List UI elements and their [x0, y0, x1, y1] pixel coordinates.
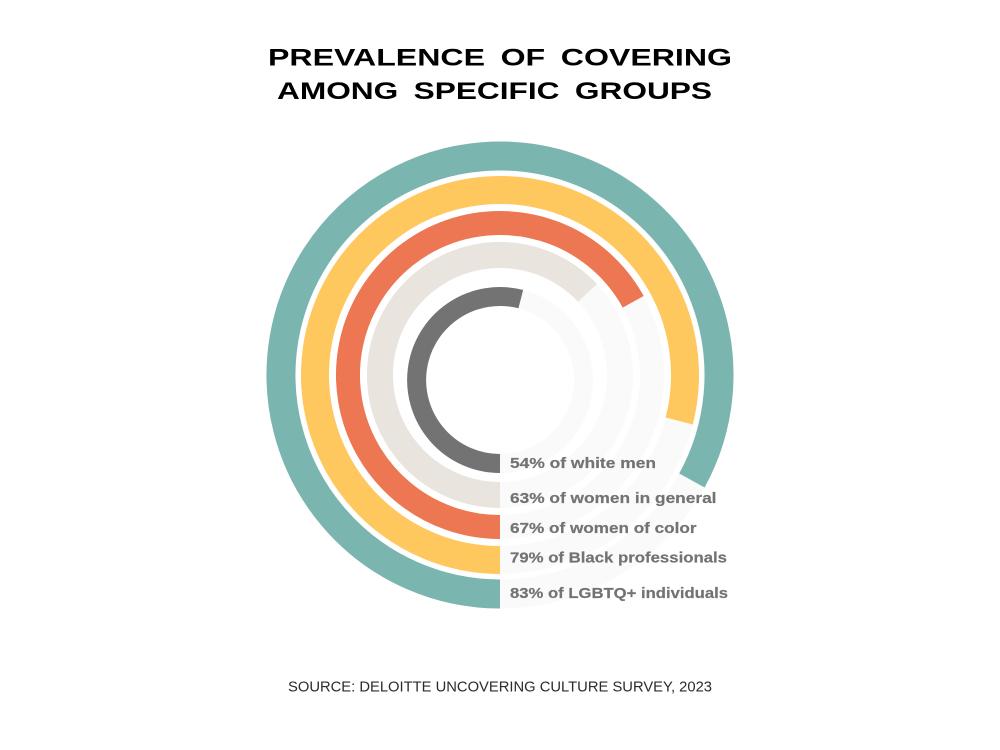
ring: 67% of women of color: [348, 223, 652, 527]
title: AMONG SPECIFIC GROUPS: [277, 78, 712, 105]
ring: 54% of white men: [416, 296, 584, 464]
ring labels: [510, 455, 728, 602]
source note: SOURCE: DELOITTE UNCOVERING CULTURE SURVEY, 2023: [288, 680, 712, 696]
ring: 83% of LGBTQ+ individuals: [281, 156, 719, 594]
label: women in general: 63% of women in general: [510, 490, 716, 507]
label: white men: 54% of white men: [510, 455, 656, 472]
radial bar chart: [281, 156, 719, 594]
ring: 63% of women in general: [380, 255, 620, 495]
label: Black professionals: 79% of Black professionals: [510, 550, 727, 567]
label: women of color: 67% of women of color: [510, 520, 697, 537]
label: LGBTQ+ individuals: 83% of LGBTQ+ individuals: [510, 585, 728, 602]
title: PREVALENCE OF COVERING: [268, 44, 732, 72]
title: [268, 44, 732, 105]
ring: 79% of Black professionals: [315, 190, 685, 560]
